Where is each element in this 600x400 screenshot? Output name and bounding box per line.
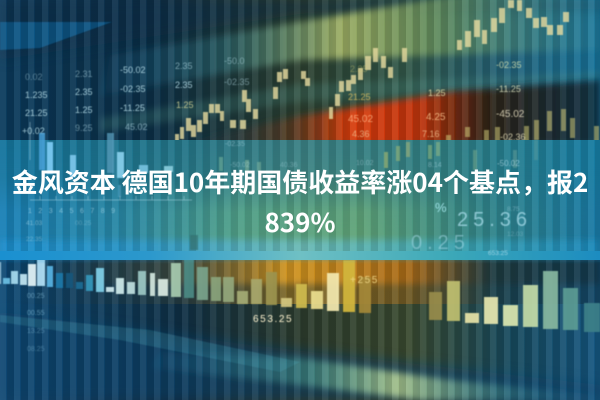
upper photo area	[0, 0, 600, 145]
band axis ruler and ghost numbers: -50.02	[230, 162, 250, 169]
band axis ruler and ghost numbers: 8.14	[428, 162, 442, 169]
upper data labels	[22, 56, 526, 142]
band axis ruler and ghost numbers: 10.02	[356, 160, 374, 167]
upper data labels: 1.25	[75, 105, 93, 115]
upper data labels: -02.36	[500, 132, 526, 142]
upper data labels: 4.25	[426, 112, 446, 123]
band axis ruler and ghost numbers: -50.02	[497, 159, 520, 168]
upper data labels: -11.25	[120, 103, 145, 113]
lower data labels: 653.25	[253, 314, 293, 325]
upper data labels: -45.02	[496, 109, 525, 120]
upper data labels: 2.31	[75, 69, 93, 79]
upper data labels: -11.25	[496, 84, 521, 94]
band axis ruler and ghost numbers: -02.35	[225, 141, 245, 148]
upper data labels: 45.02	[125, 122, 148, 132]
band axis ruler and ghost numbers: 40.36	[280, 162, 298, 169]
band axis ruler and ghost numbers: 653.25	[488, 250, 508, 257]
upper data labels: 2.35	[175, 80, 193, 90]
upper data labels: 1.25	[176, 100, 194, 110]
upper data labels: +0.02	[22, 126, 45, 136]
lower data labels	[27, 275, 379, 353]
band axis ruler and ghost numbers: 41.03	[26, 220, 43, 227]
percent and value readouts: %	[435, 200, 447, 215]
translucent title band	[0, 140, 600, 260]
upper data labels: 1.235	[25, 90, 48, 100]
percent and value readouts	[411, 200, 532, 254]
upper data labels: -02.35	[224, 77, 250, 87]
percent and value readouts: 0.25	[411, 232, 470, 254]
upper candlestick series	[175, 0, 569, 142]
band axis ruler and ghost numbers: 123456789	[28, 208, 122, 215]
lower data labels: +255	[350, 275, 379, 286]
lower photo area	[0, 255, 600, 400]
upper data labels: -50.02	[120, 65, 146, 75]
lower data labels: 00.25	[27, 293, 45, 300]
band axis ruler and ghost numbers	[26, 122, 524, 257]
title: 839%	[264, 203, 336, 240]
upper data labels: 2.35	[75, 87, 93, 97]
upper data labels: 2.35	[350, 64, 368, 74]
percent and value readouts: 25.36	[457, 209, 532, 231]
upper data labels: 21.25	[348, 92, 371, 102]
upper data labels: 1.25	[428, 88, 446, 98]
upper data labels: 9.25	[75, 123, 93, 133]
lower data labels: 00.55	[27, 310, 45, 317]
upper data labels: -02.35	[120, 84, 146, 94]
band axis ruler and ghost numbers: 00.25	[75, 220, 92, 227]
band axis ruler and ghost numbers: 22.35	[26, 236, 43, 243]
band axis ruler and ghost numbers: 12.03	[507, 231, 524, 238]
lower data labels: 13.25	[27, 328, 45, 335]
upper data labels: 21.25	[25, 108, 48, 118]
upper data labels: 2.35	[175, 61, 193, 71]
ghost bars and candles inside band	[39, 133, 538, 250]
upper data labels: 0.02	[25, 72, 43, 82]
upper data labels: -02.35	[496, 60, 522, 70]
band axis ruler and ghost numbers: 8.75	[507, 206, 520, 213]
upper right pale candles	[446, 109, 599, 148]
upper data labels: -50.0	[224, 56, 245, 66]
upper data labels: 45.02	[348, 114, 373, 125]
lower data labels: 08.25	[27, 346, 45, 353]
upper data labels: 4.36	[352, 129, 370, 139]
bar chart: lower series	[0, 252, 600, 332]
title: 金风资本 德国10年期国债收益率涨04个基点，报2	[12, 163, 588, 200]
upper data labels: 7.16	[422, 129, 440, 139]
title	[12, 163, 588, 240]
